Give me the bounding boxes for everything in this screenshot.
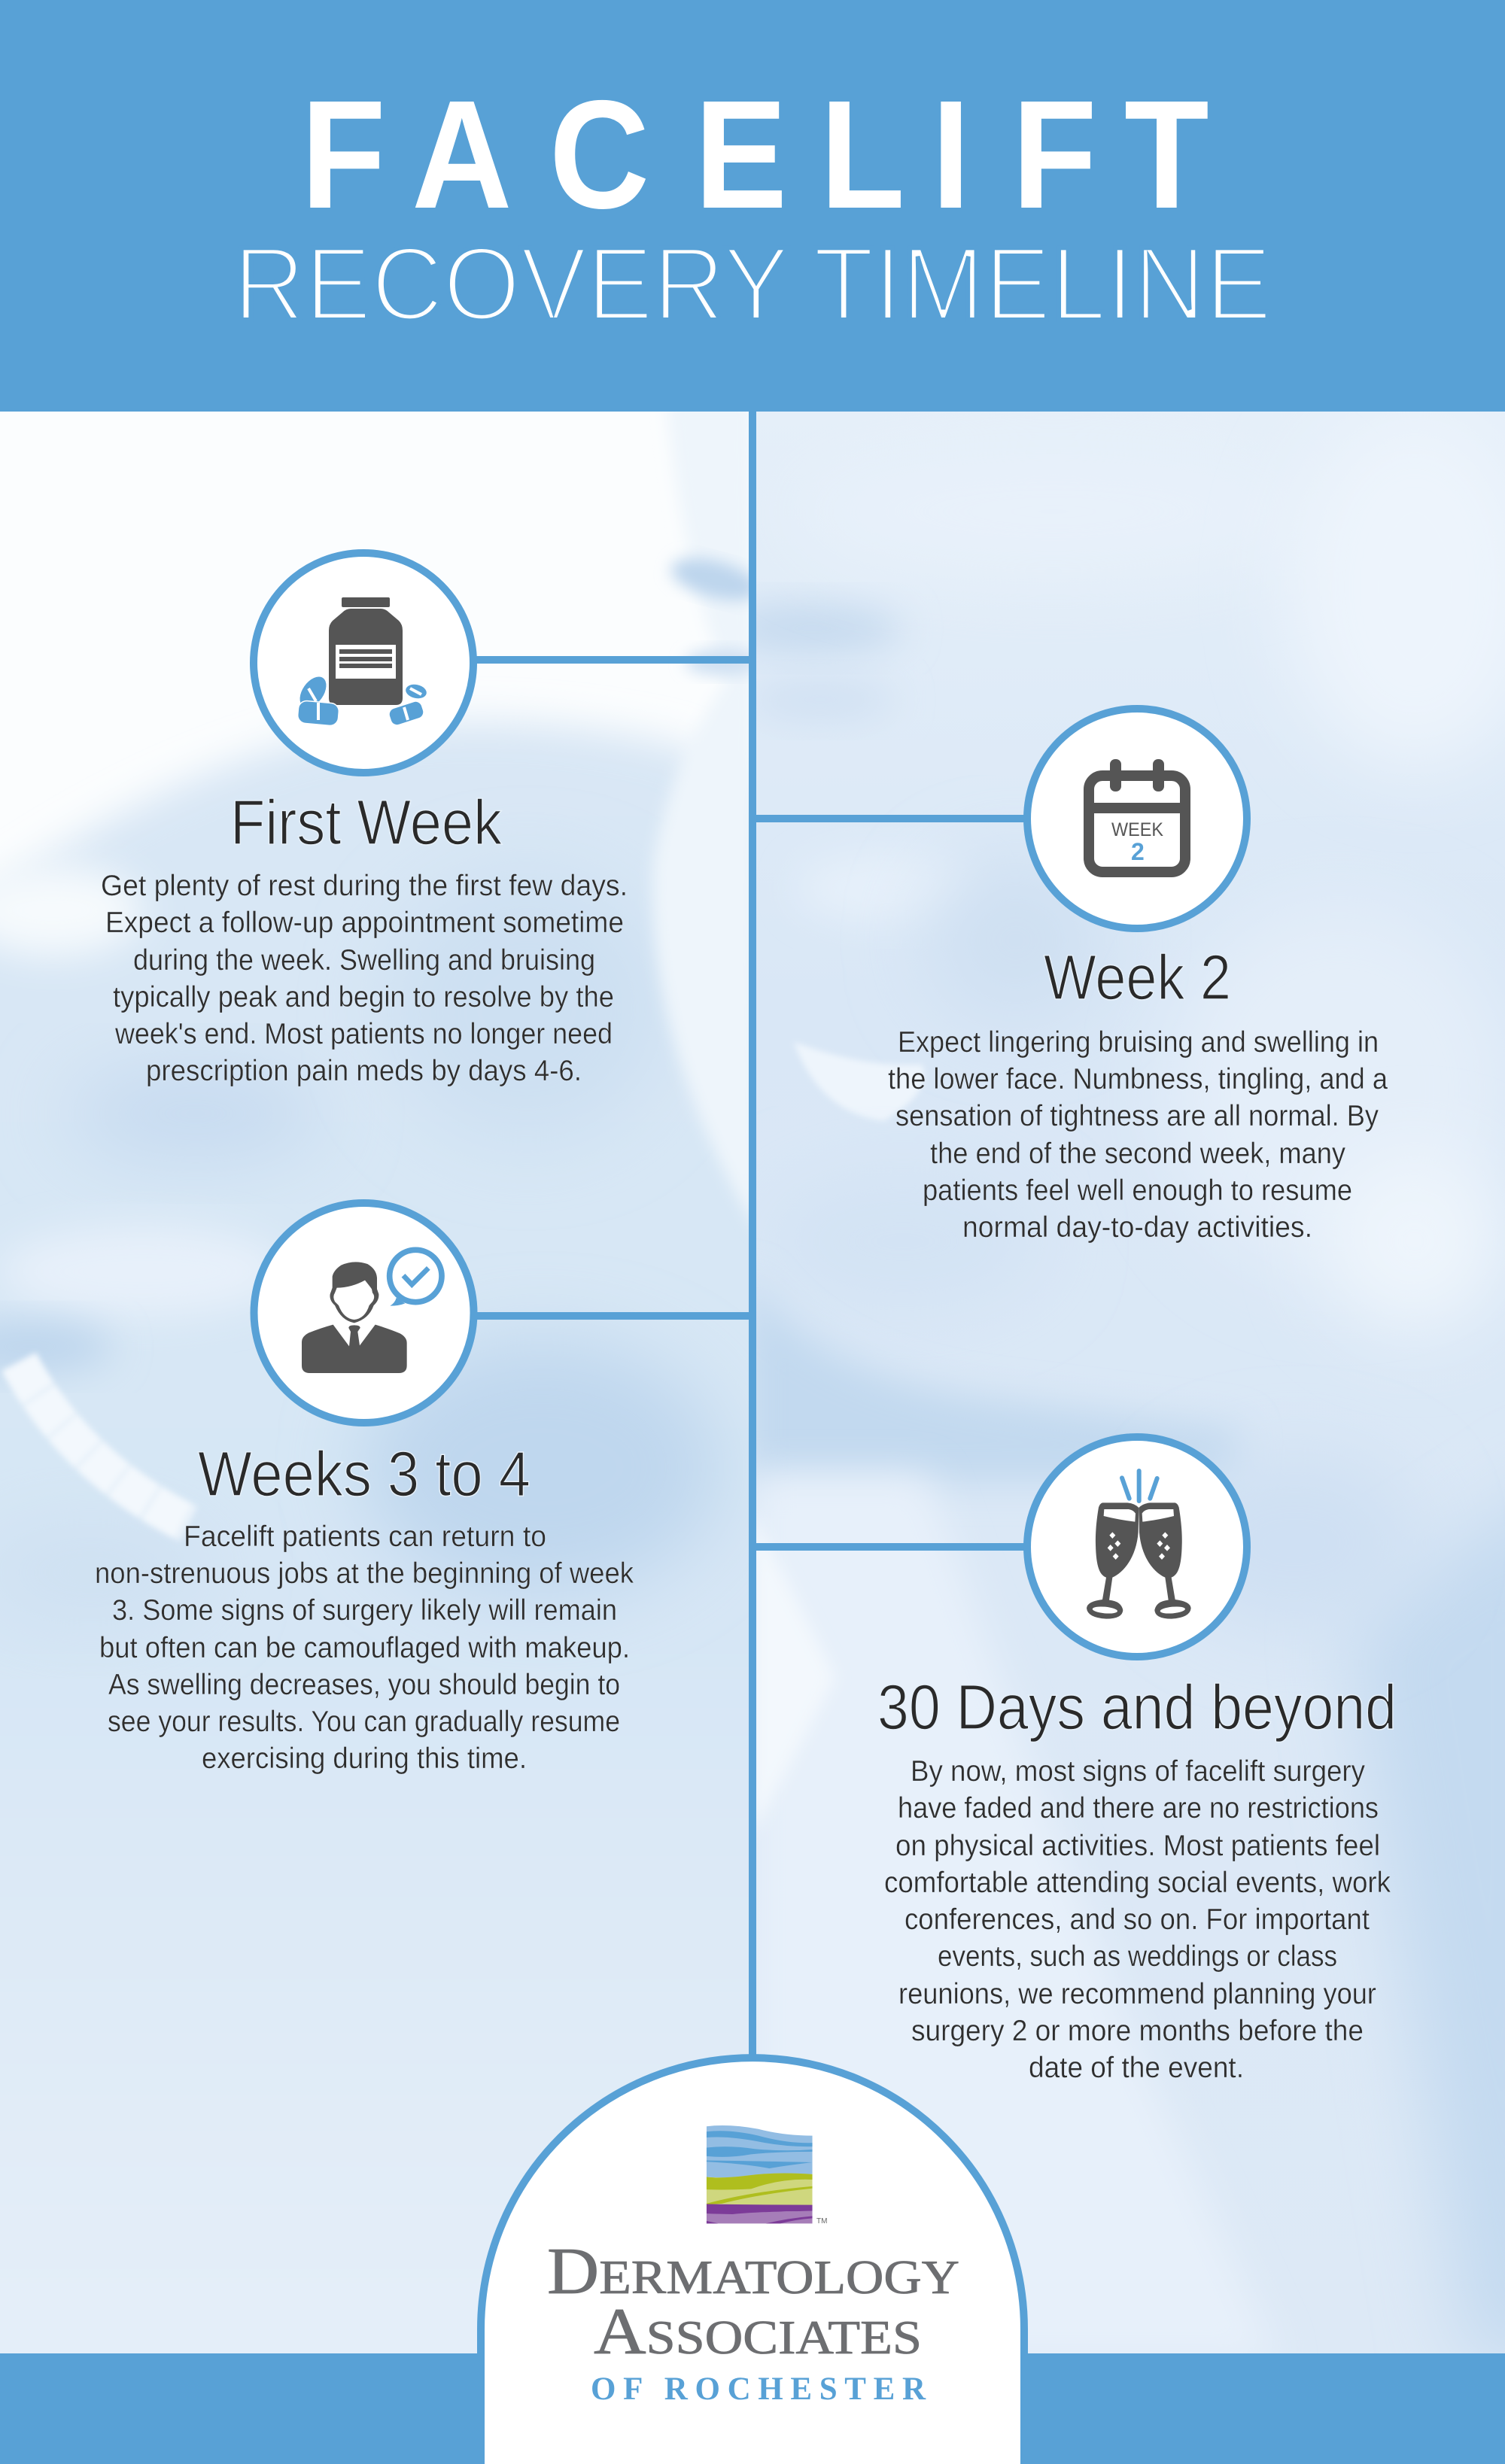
header band [0,0,1505,412]
text block [888,1026,1388,1244]
icon: calendar: 2 [1131,838,1145,865]
icon: pill bottle [254,553,473,773]
icon: person with check bubble [254,1203,474,1423]
trademark: TM [816,2217,827,2225]
text block: Get plenty of rest during the first few days. [101,870,628,902]
logo wordmark: DERMATOLOGY [547,2235,959,2308]
text block: date of the event. [1029,2052,1244,2084]
text block: comfortable attending social events, work [884,1867,1391,1899]
text block: 3. Some signs of surgery likely will remain [112,1594,617,1627]
text block: surgery 2 or more months before the [911,2015,1364,2047]
text block: prescription pain meds by days 4-6. [146,1055,582,1087]
timeline spine and connectors [474,412,1031,2059]
text block: Expect a follow-up appointment sometime [105,907,624,939]
text block: see your results. You can gradually resume [108,1706,620,1738]
title: FACELIFT: FACELIFT [301,68,1209,241]
panel: week 2 [888,709,1388,1244]
text block: Expect lingering bruising and swelling in [898,1026,1379,1059]
icon: calendar: WEEK [1111,819,1163,840]
text block: on physical activities. Most patients feel [895,1830,1380,1862]
text block: typically peak and begin to resolve by the [113,981,614,1013]
logo mark [707,2125,813,2223]
text block: normal day-to-day activities. [962,1211,1312,1244]
heading: 30 Days and beyond [877,1672,1397,1742]
text block [884,1755,1391,2084]
text block: but often can be camouflaged with makeup. [99,1632,630,1664]
text block: As swelling decreases, you should begin to [108,1669,620,1701]
text block: patients feel well enough to resume [923,1174,1352,1207]
heading: Week 2 [1044,942,1231,1013]
text block: non-strenuous jobs at the beginning of week [95,1557,634,1590]
text block: the lower face. Numbness, tingling, and a [888,1063,1388,1095]
footer arch with logo [481,2058,1024,2464]
icon: calendar [1027,709,1247,928]
subtitle: RECOVERY TIMELINE: RECOVERY TIMELINE [233,226,1272,342]
logo wordmark: OF ROCHESTER [591,2371,926,2407]
text block: sensation of tightness are all normal. By [895,1100,1379,1132]
footer band [0,2353,1505,2464]
text block: exercising during this time. [202,1742,527,1775]
text block: Facelift patients can return to [184,1521,546,1553]
text block: conferences, and so on. For important [905,1903,1370,1936]
icon: champagne toast [1027,1437,1247,1657]
heading: First Week [230,787,503,858]
panel: first week [101,553,628,1087]
panel: 30 days and beyond [877,1437,1397,2084]
text block: reunions, we recommend planning your [898,1978,1376,2010]
panel: weeks 3 to 4 [95,1203,634,1775]
text block: week's end. Most patients no longer need [114,1018,613,1050]
text block: the end of the second week, many [930,1138,1345,1170]
text block: events, such as weddings or class [938,1940,1337,1973]
text block: during the week. Swelling and bruising [133,944,595,977]
text block: By now, most signs of facelift surgery [911,1755,1365,1788]
logo wordmark [547,2235,959,2407]
text block [95,1521,634,1775]
text block [101,870,628,1087]
heading: Weeks 3 to 4 [198,1439,531,1509]
logo wordmark: ASSOCIATES [594,2295,922,2368]
text block: have faded and there are no restrictions [898,1792,1379,1824]
